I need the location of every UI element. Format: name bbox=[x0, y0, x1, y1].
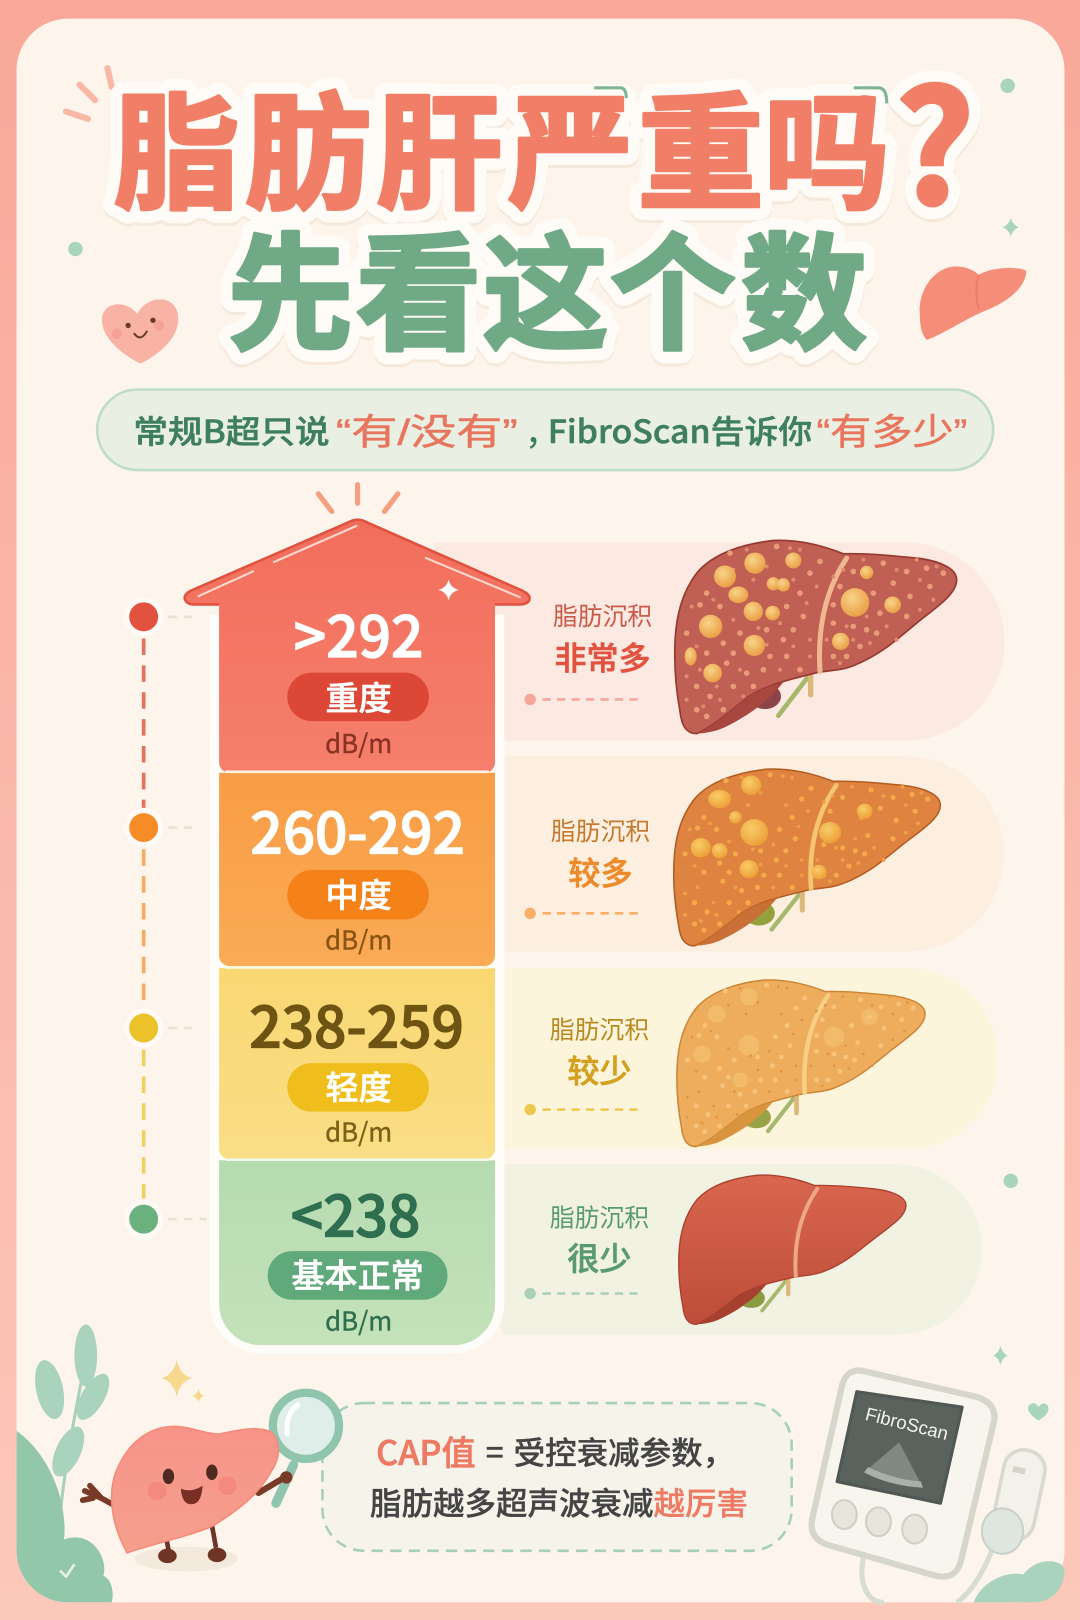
title line 1: ? bbox=[895, 24, 975, 249]
callout: CAP explanation bbox=[322, 1403, 792, 1551]
row label: 较少: 较少 bbox=[567, 1047, 631, 1093]
decoration: top-left sparks bbox=[66, 68, 112, 119]
tier: mild: dB/m bbox=[325, 1113, 392, 1150]
subtitle pill bbox=[97, 390, 993, 470]
subtitle pill: FibroScan告诉你 bbox=[548, 407, 812, 453]
icon: small liver bbox=[920, 267, 1026, 340]
tier: mild: 238-259 bbox=[249, 983, 464, 1065]
title line 1: ? bbox=[895, 24, 975, 249]
callout: CAP explanation: = bbox=[486, 1428, 504, 1474]
title line 1: 脂肪肝严重吗 bbox=[114, 56, 890, 238]
tier: severe: >292 bbox=[294, 592, 423, 674]
liver: healthy bbox=[679, 1175, 906, 1324]
tier: severe: dB/m bbox=[325, 724, 392, 761]
row label: 较多: 脂肪沉积 bbox=[551, 812, 650, 848]
device: FibroScan: FibroScan bbox=[863, 1403, 951, 1444]
callout: CAP explanation: 脂肪越多超声波衰减越厉害 bbox=[370, 1479, 748, 1525]
liver: mild fat bbox=[677, 980, 925, 1147]
row label: 较多: 较多 bbox=[568, 848, 632, 894]
subtitle pill: ， bbox=[525, 408, 557, 454]
left scale with dots bbox=[124, 597, 207, 1239]
subtitle pill: 常规B超只说 bbox=[133, 407, 330, 453]
foliage: bottom left bbox=[17, 1325, 116, 1602]
title line 1: 脂肪肝严重吗 bbox=[114, 53, 890, 235]
row label: 较多 bbox=[524, 812, 650, 919]
row label: 很少 bbox=[524, 1198, 649, 1299]
title line 2: 先看这个数 bbox=[227, 197, 867, 379]
tier: severe bbox=[185, 520, 530, 773]
row label: 较少 bbox=[524, 1010, 649, 1115]
row band: 较少 bbox=[501, 968, 998, 1149]
subtitle pill: “有/没有” bbox=[336, 411, 518, 452]
row label: 非常多: 非常多 bbox=[554, 633, 651, 679]
tier: moderate: 中度 bbox=[326, 869, 392, 917]
sparkles: gold bbox=[161, 1360, 205, 1403]
tier: mild bbox=[219, 968, 495, 1159]
title line 2: 先看这个数 bbox=[227, 194, 867, 376]
icon: smiling heart bbox=[102, 299, 178, 364]
arrow sparks bbox=[318, 485, 398, 511]
row label: 非常多 bbox=[524, 597, 652, 705]
callout: CAP explanation: CAP值 bbox=[376, 1425, 476, 1475]
title line 2: 先看这个数 bbox=[227, 194, 867, 376]
row band: 很少 bbox=[501, 1164, 982, 1335]
row label: 很少: 很少 bbox=[567, 1234, 631, 1280]
row label: 较少: 脂肪沉积 bbox=[550, 1010, 649, 1046]
tier: moderate: dB/m bbox=[325, 920, 392, 957]
device: FibroScan bbox=[812, 1371, 1049, 1602]
tier: normal: dB/m bbox=[325, 1302, 392, 1339]
row label: 非常多: 脂肪沉积 bbox=[553, 597, 652, 633]
tier: normal: 基本正常 bbox=[291, 1249, 424, 1297]
liver: moderate fat bbox=[674, 769, 940, 946]
decoration: dots and sparkle bbox=[68, 79, 1049, 1421]
title line 1: 脂肪肝严重吗 bbox=[114, 53, 890, 235]
tier: normal: <238 bbox=[291, 1172, 420, 1254]
severity arrow tower bbox=[185, 520, 530, 1353]
mascot: liver with magnifier bbox=[83, 1393, 339, 1571]
liver: severe fat bbox=[675, 540, 957, 734]
tier: moderate bbox=[219, 772, 495, 966]
tier: normal bbox=[219, 1160, 495, 1345]
row label: 很少: 脂肪沉积 bbox=[550, 1198, 649, 1234]
foliage: bottom right bbox=[974, 1561, 1064, 1602]
callout: CAP explanation: 受控衰减参数， bbox=[514, 1428, 734, 1474]
tier: moderate: 260-292 bbox=[250, 788, 465, 870]
title line 1: ? bbox=[895, 27, 975, 252]
row band: 较多 bbox=[501, 756, 1004, 952]
tier: mild: 轻度 bbox=[326, 1061, 392, 1109]
tier: severe: 重度 bbox=[326, 672, 392, 720]
row band: 非常多 bbox=[434, 542, 1005, 741]
subtitle pill: “有多少” bbox=[816, 411, 967, 452]
